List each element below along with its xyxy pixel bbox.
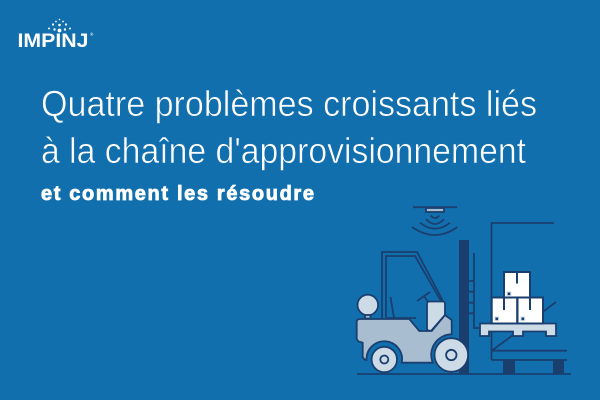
fork carriage frame (492, 223, 567, 360)
steering wheel and lever (386, 292, 430, 318)
top box (504, 272, 530, 298)
title line 2: à la chaîne d'approvisionnement (41, 130, 526, 171)
pallet legs (503, 360, 564, 374)
boxes (492, 272, 543, 324)
subtitle: et comment les résoudre (41, 183, 314, 205)
RFID reader with signal waves (412, 207, 457, 235)
mast rails (469, 253, 481, 328)
forklift cab frame (382, 252, 443, 318)
bottom right box (518, 298, 543, 324)
forklift body (357, 315, 452, 363)
title line 1: Quatre problèmes croissants liés (41, 83, 537, 124)
ground line (357, 373, 571, 375)
headrest ball (358, 295, 378, 315)
neck (365, 315, 370, 318)
rear wheel (372, 347, 397, 372)
logo dots (48, 19, 71, 32)
logo wordmark: IMPINJ (18, 31, 88, 52)
driver seat back panel (427, 302, 445, 331)
forklift mast (459, 240, 469, 374)
logo: Impinj (18, 19, 94, 52)
registered mark: ® (90, 31, 94, 37)
pallet (480, 324, 556, 336)
illustration: forklift with pallet (357, 207, 571, 374)
title (41, 83, 537, 171)
front wheel (434, 338, 468, 372)
bottom left box (492, 298, 517, 324)
